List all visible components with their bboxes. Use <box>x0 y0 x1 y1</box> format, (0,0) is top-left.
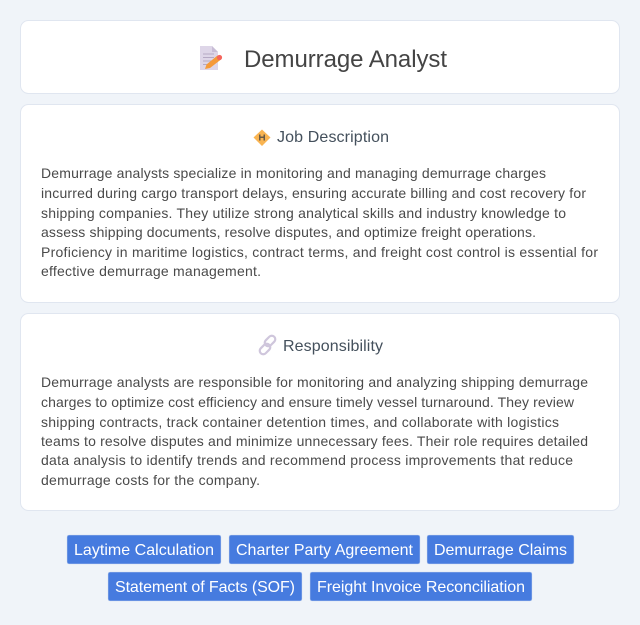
tag: Freight Invoice Reconciliation: Freight Invoice Reconciliation <box>317 579 525 596</box>
text block: responsibility <box>41 374 588 488</box>
text block: responsibility: charges to optimize cost efficiency and ensure timely vessel turnaround. They review <box>41 394 575 410</box>
icon: diamond sign <box>254 130 270 146</box>
icon: document with pencil <box>200 46 222 70</box>
tag: Freight Invoice Reconciliation <box>310 572 532 601</box>
text block: responsibility: shipping contracts, track container detention times, and collaborate with logistics <box>41 414 559 430</box>
heading: responsibility: Responsibility <box>283 338 383 355</box>
text block: responsibility: Demurrage analysts are responsible for monitoring and analyzing shipping demurrage <box>41 374 588 390</box>
tag: Statement of Facts (SOF): Statement of Facts (SOF) <box>115 579 295 596</box>
icon: chain link <box>258 334 277 356</box>
text block: job description: effective demurrage management. <box>41 263 261 279</box>
panel: title card <box>20 20 620 94</box>
text block: responsibility: demurrage costs for the company. <box>41 472 260 488</box>
title: Demurrage Analyst <box>244 46 447 73</box>
text block: job description: Proficiency in maritime logistics, contract terms, and freight cost control is essential for <box>41 244 598 260</box>
text block: job description: shipping companies. They utilize strong analytical skills and industry knowledge to <box>41 205 566 221</box>
heading: job description: Job Description <box>277 129 389 146</box>
tag: Charter Party Agreement <box>229 535 420 564</box>
panel: responsibility <box>20 314 620 510</box>
tag: Charter Party Agreement: Charter Party Agreement <box>236 542 414 559</box>
tag: Statement of Facts (SOF) <box>108 572 302 601</box>
panel: job description <box>20 104 620 302</box>
text block: job description: incurred during cargo transport delays, ensuring accurate billing and cost recovery for <box>41 185 586 201</box>
tag: Demurrage Claims <box>427 535 574 564</box>
text block: responsibility: teams to resolve disputes and minimize unnecessary fees. Their role requires detailed <box>41 433 588 449</box>
tag: Laytime Calculation <box>67 535 221 564</box>
text block: job description: Demurrage analysts specialize in monitoring and managing demurrage charges <box>41 165 546 181</box>
text block: job description: assess shipping documents, resolve disputes, and optimize freight operations. <box>41 224 536 240</box>
tag: Demurrage Claims: Demurrage Claims <box>434 542 567 559</box>
tag: Laytime Calculation: Laytime Calculation <box>74 542 214 559</box>
text block: responsibility: data analysis to identify trends and recommend process improvements that reduce <box>41 452 573 468</box>
text block: job description <box>41 165 598 279</box>
